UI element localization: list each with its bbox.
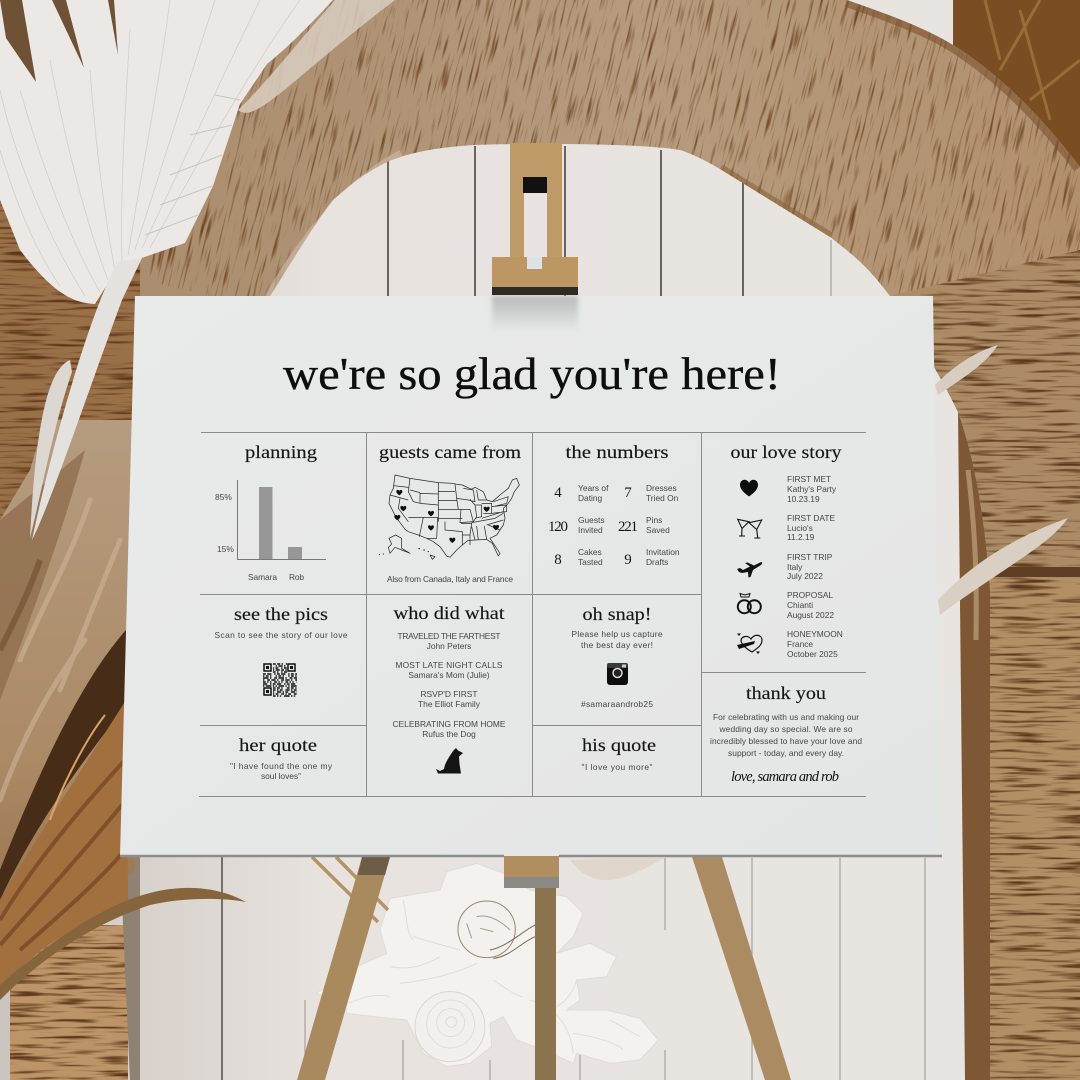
item: late night calls: MOST LATE NIGHT CALLS bbox=[396, 660, 503, 670]
brown frond bbox=[0, 888, 246, 1000]
story: first trip: July 2022 bbox=[787, 571, 823, 581]
pale frond lower right bbox=[938, 518, 1068, 615]
story: first met: Kathy's Party bbox=[787, 484, 837, 494]
dark dried grass corner bbox=[953, 0, 1080, 167]
stat: pins saved bbox=[618, 515, 670, 535]
story: first trip: Italy bbox=[787, 562, 803, 572]
story: honeymoon bbox=[787, 629, 843, 659]
stat: years of dating: Dating bbox=[578, 493, 603, 503]
easel centre block bbox=[504, 851, 559, 888]
item: traveled the farthest: John Peters bbox=[427, 641, 471, 651]
panel: see the pics bbox=[214, 604, 348, 697]
icon: dog bbox=[436, 748, 463, 774]
stat: invitation drafts bbox=[624, 547, 680, 568]
stat: invitation drafts: 9 bbox=[624, 552, 632, 568]
stat: years of dating: 4 bbox=[554, 485, 562, 501]
icon: martini glasses bbox=[738, 519, 762, 538]
item: celebrating from home: CELEBRATING FROM HOME bbox=[392, 719, 506, 729]
woven column right bbox=[990, 578, 1080, 1080]
item: late night calls bbox=[396, 660, 503, 680]
heading: who did what: who did what bbox=[394, 603, 505, 623]
bar chart: Rob bbox=[289, 572, 304, 582]
pampas grass bbox=[0, 420, 135, 985]
item: rsvp first: RSVP'D FIRST bbox=[421, 689, 477, 699]
stat: dresses tried on: Dresses bbox=[646, 483, 677, 493]
item: late night calls: Samara's Mom (Julie) bbox=[408, 670, 490, 680]
thank you message bbox=[710, 712, 862, 758]
story: first met: FIRST MET bbox=[787, 474, 831, 484]
grid lines bbox=[199, 432, 866, 796]
story: first trip: FIRST TRIP bbox=[787, 552, 833, 562]
hashtag: #samaraandrob25 bbox=[581, 699, 653, 709]
stat: guests invited: Invited bbox=[578, 525, 603, 535]
thank you message: wedding day so special. We are so bbox=[718, 724, 853, 734]
story: first met bbox=[787, 474, 837, 504]
stat: cakes tasted: 8 bbox=[554, 552, 562, 568]
story: proposal: Chianti bbox=[787, 600, 813, 610]
panel: who did what bbox=[392, 603, 506, 774]
stat: guests invited: 120 bbox=[548, 519, 568, 535]
story: honeymoon: France bbox=[787, 639, 813, 649]
panel: the numbers bbox=[548, 442, 680, 568]
stat: dresses tried on bbox=[624, 483, 679, 503]
stat: guests invited: Guests bbox=[578, 515, 605, 525]
sign board bbox=[120, 296, 942, 856]
stat: years of dating: Years of bbox=[578, 483, 609, 493]
quote text: "I have found the one my bbox=[230, 761, 333, 771]
title: we're so glad you're here! bbox=[283, 349, 781, 399]
stat: pins saved: Saved bbox=[646, 525, 670, 535]
item: rsvp first bbox=[418, 689, 481, 709]
story: first trip bbox=[787, 552, 833, 581]
story: honeymoon: HONEYMOON bbox=[787, 629, 843, 639]
quote text: soul loves" bbox=[261, 771, 301, 781]
icon: QR code bbox=[263, 663, 297, 697]
item: celebrating from home: Rufus the Dog bbox=[422, 729, 476, 739]
heading: planning: planning bbox=[245, 442, 317, 462]
item: traveled the farthest: TRAVELED THE FARTHEST bbox=[398, 631, 500, 641]
bar chart: Samara bbox=[248, 572, 277, 582]
easel top clamp bbox=[492, 143, 578, 295]
heading: her quote: her quote bbox=[239, 735, 317, 755]
panel: guests came from bbox=[379, 442, 521, 584]
story: first date: 11.2.19 bbox=[787, 532, 815, 542]
panel: his quote bbox=[582, 735, 656, 772]
easel left leg bbox=[297, 857, 390, 1080]
panel: oh snap bbox=[572, 604, 663, 709]
icon: camera bbox=[607, 663, 628, 685]
heading: guests came from: guests came from bbox=[379, 442, 521, 462]
heading: oh snap: oh snap! bbox=[582, 604, 652, 624]
heading: his quote: his quote bbox=[582, 735, 656, 755]
stat: guests invited bbox=[548, 515, 605, 535]
white paper flower bbox=[317, 863, 658, 1067]
icon: heart with plane bbox=[737, 634, 762, 654]
bar chart: 15% bbox=[217, 544, 234, 554]
story: proposal: August 2022 bbox=[787, 610, 834, 620]
icon: plane bbox=[737, 562, 762, 578]
panel: our love story bbox=[730, 442, 843, 659]
quote text bbox=[230, 761, 333, 781]
icon: heart bbox=[740, 480, 758, 496]
easel centre post bbox=[535, 885, 556, 1080]
thank you message: For celebrating with us and making our bbox=[713, 712, 859, 722]
signature: love, samara and rob bbox=[731, 769, 839, 785]
pale frond upper right bbox=[935, 345, 998, 395]
item: celebrating from home bbox=[392, 719, 506, 739]
text: capture: the best day ever! bbox=[581, 640, 653, 650]
story: first date bbox=[787, 513, 835, 542]
story: first date: FIRST DATE bbox=[787, 513, 835, 523]
stat: years of dating bbox=[554, 483, 609, 503]
pale frond bottom right bbox=[570, 858, 665, 880]
heading: see the pics: see the pics bbox=[234, 604, 328, 624]
story: proposal bbox=[787, 590, 834, 620]
panel: thank you bbox=[710, 683, 862, 785]
stat: dresses tried on: 7 bbox=[624, 485, 632, 501]
heading: thank you: thank you bbox=[746, 683, 826, 703]
white feather bbox=[0, 0, 333, 540]
story: first met: 10.23.19 bbox=[787, 494, 820, 504]
easel right leg bbox=[692, 857, 791, 1080]
heading: the numbers: the numbers bbox=[566, 442, 669, 462]
text: capture bbox=[572, 629, 663, 650]
stat: cakes tasted: Cakes bbox=[578, 547, 602, 557]
thank you message: incredibly blessed to have your love and bbox=[710, 736, 862, 746]
stat: cakes tasted: Tasted bbox=[578, 557, 603, 567]
US map bbox=[379, 475, 519, 559]
stat: dresses tried on: Tried On bbox=[646, 493, 679, 503]
bar chart bbox=[215, 480, 326, 582]
panel: her quote bbox=[230, 735, 333, 781]
stat: cakes tasted bbox=[554, 547, 603, 568]
thank you message: support - today, and every day. bbox=[728, 748, 844, 758]
heading: our love story: our love story bbox=[730, 442, 842, 462]
story: honeymoon: October 2025 bbox=[787, 649, 838, 659]
panel: planning bbox=[215, 442, 326, 582]
stat: pins saved: Pins bbox=[646, 515, 662, 525]
bar chart: 85% bbox=[215, 492, 232, 502]
text: scan: Scan to see the story of our love bbox=[214, 630, 348, 640]
story: proposal: PROPOSAL bbox=[787, 590, 833, 600]
note: also from: Also from Canada, Italy and France bbox=[387, 574, 513, 584]
icon: rings bbox=[738, 594, 761, 613]
story: first date: Lucio's bbox=[787, 523, 813, 533]
thin background sticks bbox=[312, 857, 388, 922]
stat: invitation drafts: Invitation bbox=[646, 547, 680, 557]
stat: invitation drafts: Drafts bbox=[646, 557, 668, 567]
woven column left bbox=[10, 857, 140, 1080]
stat: pins saved: 221 bbox=[618, 519, 638, 535]
text: capture: Please help us capture bbox=[572, 629, 663, 639]
item: traveled the farthest bbox=[398, 631, 500, 651]
dark arch underside right bbox=[958, 412, 990, 1080]
quote text: "I love you more" bbox=[582, 762, 653, 772]
woven rattan arch bbox=[0, 0, 1080, 600]
item: rsvp first: The Elliot Family bbox=[418, 699, 481, 709]
